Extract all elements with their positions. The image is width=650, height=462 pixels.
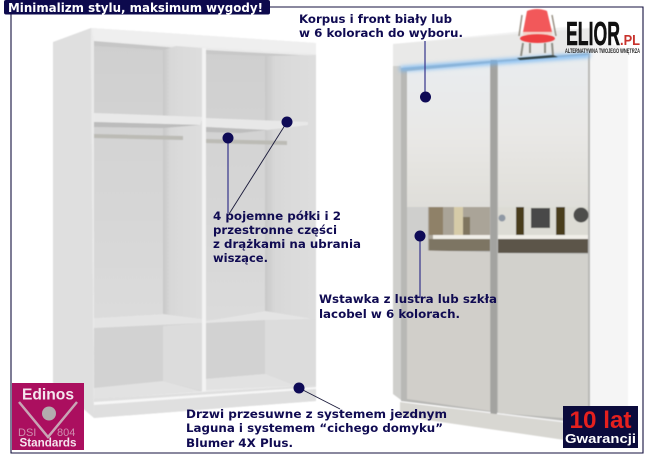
callout leader: sliding doors (294, 382, 340, 409)
sliding rail base (94, 385, 316, 418)
text: sliding system: Laguna i systemem “cichego domyku” (186, 421, 443, 435)
left upper shelf (94, 113, 203, 128)
sliding door wardrobe illustration (393, 27, 628, 444)
text: shelves and rods: przestronne części (213, 223, 337, 237)
callout leaders: shelves (222, 116, 292, 214)
left frame strip (393, 66, 401, 400)
right upper shelf (206, 118, 308, 133)
wardrobe front body (91, 28, 316, 418)
blue LED glow (400, 53, 590, 71)
text: sliding system: Drzwi przesuwne z systemem jezdnym (186, 407, 447, 421)
wardrobe outer body (393, 27, 628, 444)
left door upper panel (407, 63, 490, 207)
door frame (401, 53, 590, 424)
text: sliding system: Blumer 4X Plus. (186, 436, 293, 450)
badge: Edinos standards: Edinos (22, 386, 74, 404)
lower right bay (206, 319, 316, 390)
left door lower panel (407, 250, 490, 411)
center divider (202, 48, 206, 392)
top front strip (92, 28, 316, 54)
text: sliding system (186, 407, 447, 450)
text: shelves and rods: z drążkami na ubrania (213, 237, 361, 251)
upper left bay (94, 41, 202, 320)
right glass insert (498, 207, 588, 253)
logo: ELIOR.PL wordmark: .PL (620, 32, 640, 49)
top front strip (393, 28, 590, 68)
left glass insert (407, 207, 490, 251)
callout leader: insert (414, 230, 426, 298)
badge: Edinos standards (12, 383, 84, 450)
left side panel (53, 28, 94, 418)
text: glass insert: lacobel w 6 kolorach. (319, 307, 460, 321)
lower right shelf (206, 311, 308, 323)
title banner: Minimalizm stylu, maksimum wygody! (8, 1, 263, 15)
open wardrobe illustration (53, 28, 316, 418)
badge: 10 year warranty (563, 406, 638, 448)
text: glass insert: Wstawka z lustra lub szkła (319, 292, 497, 306)
right door upper panel (498, 55, 588, 207)
center door handle (490, 60, 497, 414)
badge: 10 year warranty: 10 lat (570, 407, 632, 434)
right hanging rod (206, 139, 287, 145)
base plinth (400, 402, 592, 444)
text: shelves and rods: wiszące. (213, 251, 268, 265)
right side panel (590, 50, 628, 444)
right door lower panel (498, 253, 588, 420)
badge: Edinos standards: DSI (18, 427, 36, 439)
lower left shelf (94, 314, 203, 328)
lower left bay (94, 323, 202, 399)
text: shelves and rods: 4 pojemne półki i 2 (213, 209, 341, 223)
text: shelves and rods (213, 209, 361, 265)
text: body and front: Korpus i front biały lub (299, 12, 452, 26)
left hanging rod (94, 134, 183, 140)
badge: Edinos standards: Standards (20, 438, 76, 450)
logo: red chair (517, 9, 558, 60)
text: glass insert (319, 292, 497, 321)
upper right bay (206, 50, 316, 321)
text: body and front (299, 12, 463, 40)
callout leader: front (420, 41, 431, 102)
text: body and front: w 6 kolorach do wyboru. (299, 26, 463, 40)
badge: Edinos standards: 804 (57, 427, 75, 439)
badge: 10 year warranty: Gwarancji (565, 432, 636, 446)
